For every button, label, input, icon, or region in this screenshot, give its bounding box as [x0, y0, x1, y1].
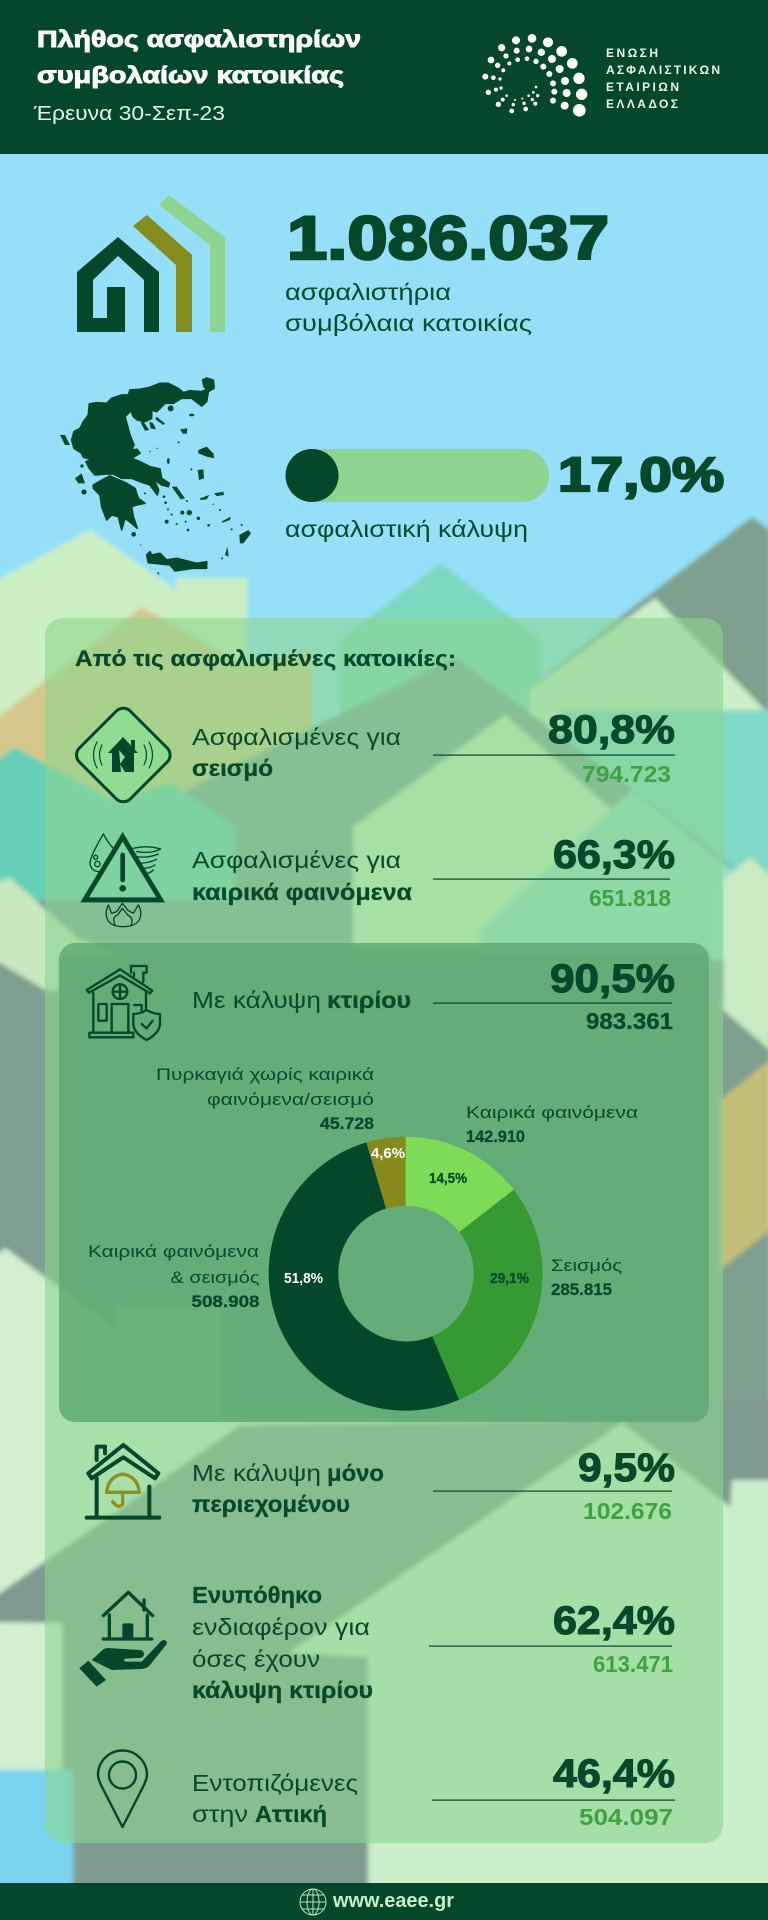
logo text: ΕΝΩΣΗ — [606, 46, 658, 60]
donut label: fire: 45.728 — [320, 1114, 374, 1133]
progress bar — [286, 449, 549, 502]
donut label: weather and earthquake: Καιρικά φαινόμενα — [88, 1242, 259, 1261]
row: Attica: 46,4% — [553, 1752, 675, 1796]
slice: fire 4,6% — [366, 1137, 406, 1208]
donut chart — [269, 1137, 543, 1411]
row: earthquake — [192, 708, 675, 787]
row: mortgage: Ενυπόθηκο — [192, 1582, 322, 1608]
slice values: 51,8% — [284, 1270, 323, 1287]
stat: total policies: ασφαλιστήρια — [285, 279, 451, 305]
row: Attica: 504.097 — [579, 1804, 673, 1830]
donut label: fire: Πυρκαγιά χωρίς καιρικά — [156, 1065, 374, 1084]
icon: globe — [300, 1889, 326, 1915]
icon: house with umbrella — [87, 1445, 159, 1518]
logo text: ΑΣΦΑΛΙΣΤΙΚΩΝ — [606, 63, 720, 77]
slice values — [284, 1145, 529, 1287]
donut label: earthquake — [551, 1256, 622, 1299]
row: weather events: 651.818 — [589, 885, 671, 911]
title: συμβολαίων κατοικίας — [37, 62, 344, 88]
row: mortgage: 62,4% — [553, 1599, 675, 1643]
row: Attica: Εντοπιζόμενες — [192, 1770, 358, 1796]
slice values: 29,1% — [490, 1270, 529, 1287]
row: Attica: Αττική — [255, 1801, 327, 1827]
row: weather events: Ασφαλισμένες για — [192, 847, 401, 873]
donut label: weather: 142.910 — [466, 1127, 525, 1146]
donut label: earthquake: Σεισμός — [551, 1256, 622, 1275]
donut label: weather: Καιρικά φαινόμενα — [466, 1103, 638, 1122]
slice: weather and earthquake 51,8% — [269, 1142, 459, 1411]
panel: building coverage — [59, 943, 709, 1422]
logo: dotted arc — [482, 34, 587, 117]
row: earthquake: 80,8% — [548, 708, 675, 752]
row: Attica: στην — [192, 1801, 248, 1827]
row: weather events: 66,3% — [553, 833, 675, 877]
row: contents only — [192, 1446, 675, 1524]
row: mortgage: 613.471 — [593, 1651, 673, 1677]
header band — [0, 0, 768, 154]
donut label: fire — [156, 1065, 374, 1133]
logo text: ΕΛΛΑΔΟΣ — [606, 97, 678, 111]
stat: total policies: συμβόλαια κατοικίας — [285, 310, 532, 336]
row: building coverage: Με κάλυψη — [192, 987, 321, 1013]
stat: insurance coverage: 17,0% — [558, 449, 724, 502]
row: earthquake: Ασφαλισμένες για — [192, 724, 401, 750]
slice values: 4,6% — [371, 1145, 405, 1162]
stat: total policies: 1.086.037 — [287, 204, 609, 272]
row: building coverage: 983.361 — [586, 1008, 673, 1034]
stat: insurance coverage: ασφαλιστική κάλυψη — [285, 516, 528, 542]
stat: total policies — [285, 204, 609, 336]
donut label: weather — [466, 1103, 638, 1146]
row: earthquake: σεισμό — [192, 755, 273, 781]
footer band — [0, 1883, 768, 1920]
icon: weather warning — [80, 832, 165, 927]
icon: houses logo — [77, 195, 225, 332]
row: contents only: περιεχομένου — [192, 1491, 350, 1517]
icon: house with shield — [87, 966, 160, 1040]
slice: weather 14,5% — [406, 1137, 514, 1232]
row: building coverage — [192, 957, 675, 1034]
row: contents only: 102.676 — [583, 1498, 672, 1524]
row: mortgage: ενδιαφέρον για — [192, 1614, 370, 1640]
panel heading: Από τις ασφαλισμένες κατοικίες: — [75, 646, 456, 671]
title — [37, 26, 361, 88]
row: contents only: μόνο — [327, 1460, 384, 1486]
donut label: weather and earthquake: & σεισμός — [170, 1268, 260, 1287]
donut label: weather and earthquake: 508.908 — [192, 1292, 260, 1311]
logo text — [606, 46, 720, 111]
title: Πλήθος ασφαλιστηρίων — [37, 26, 361, 52]
slice values: 14,5% — [429, 1170, 467, 1187]
website: www.eaee.gr — [332, 1890, 454, 1912]
donut label: earthquake: 285.815 — [551, 1280, 612, 1299]
row: building coverage: κτιρίου — [327, 987, 411, 1013]
stat: insurance coverage — [285, 449, 724, 542]
logo text: ΕΤΑΙΡΙΩΝ — [606, 80, 679, 94]
subtitle: survey date: Έρευνα 30-Σεπ-23 — [33, 103, 225, 125]
row: contents only: Με κάλυψη — [192, 1460, 321, 1486]
row: contents only: 9,5% — [578, 1446, 675, 1490]
row: mortgage: κάλυψη κτιρίου — [192, 1677, 373, 1703]
slice: earthquake 29,1% — [432, 1190, 543, 1400]
row: weather events: καιρικά φαινόμενα — [192, 879, 412, 905]
row: earthquake: 794.723 — [582, 761, 671, 787]
row: mortgage — [192, 1582, 675, 1703]
panel: insured homes — [45, 618, 723, 1843]
donut label: weather and earthquake — [88, 1242, 260, 1311]
map of Greece — [60, 378, 251, 574]
icon: earthquake house — [72, 704, 174, 806]
row: Attica — [192, 1752, 675, 1830]
icon: location pin — [98, 1750, 147, 1827]
row: building coverage: 90,5% — [550, 957, 675, 1001]
icon: hand holding house — [79, 1592, 167, 1687]
row: mortgage: όσες έχουν — [192, 1646, 320, 1672]
row: weather events — [192, 833, 675, 911]
donut label: fire: φαινόμενα/σεισμό — [207, 1090, 374, 1109]
